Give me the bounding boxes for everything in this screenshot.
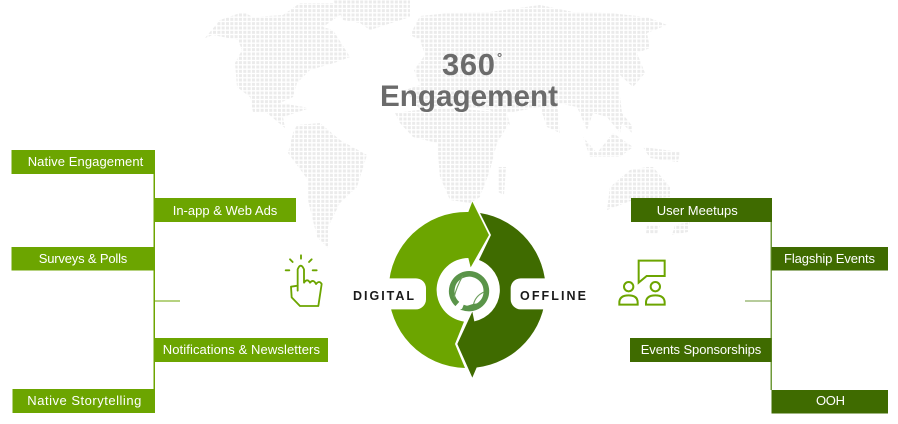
box: OOH: OOH	[816, 393, 845, 408]
box: Notifications & Newsletters: Notifications & Newsletters	[163, 342, 320, 357]
box: In-app & Web Ads	[155, 198, 296, 222]
digital connector lines	[154, 174, 180, 390]
logo	[452, 274, 486, 311]
box: User Meetups: User Meetups	[657, 203, 738, 218]
cycle diagram	[373, 202, 563, 378]
box: Flagship Events: Flagship Events	[784, 251, 876, 266]
title: °	[497, 50, 502, 65]
digital notch	[373, 278, 426, 309]
box: Notifications & Newsletters	[155, 338, 328, 362]
box: In-app & Web Ads: In-app & Web Ads	[173, 203, 278, 218]
title	[380, 47, 558, 113]
title: 360	[442, 47, 495, 82]
box: User Meetups	[631, 198, 772, 222]
box: OOH	[772, 390, 888, 414]
box: Surveys & Polls	[12, 247, 155, 270]
title: Engagement	[380, 80, 558, 113]
offline notch	[511, 278, 563, 309]
label: DIGITAL: DIGITAL	[353, 289, 414, 303]
label: OFFLINE: OFFLINE	[520, 289, 586, 303]
box: Surveys & Polls: Surveys & Polls	[39, 251, 128, 266]
box: Native Storytelling	[12, 389, 155, 413]
icon: tapping hand	[286, 255, 322, 306]
icon: two people talking	[619, 261, 665, 305]
box: Native Engagement: Native Engagement	[28, 154, 144, 169]
offline connector lines	[745, 198, 772, 390]
box: Flagship Events	[772, 247, 888, 270]
arrow: digital	[389, 202, 489, 368]
arrow: offline	[457, 213, 546, 378]
box: Native Engagement	[12, 150, 155, 174]
box: Native Storytelling: Native Storytelling	[27, 393, 141, 408]
box: Events Sponsorships: Events Sponsorships	[641, 342, 762, 357]
world map dotted background	[200, 2, 700, 249]
box: Events Sponsorships	[630, 338, 772, 362]
